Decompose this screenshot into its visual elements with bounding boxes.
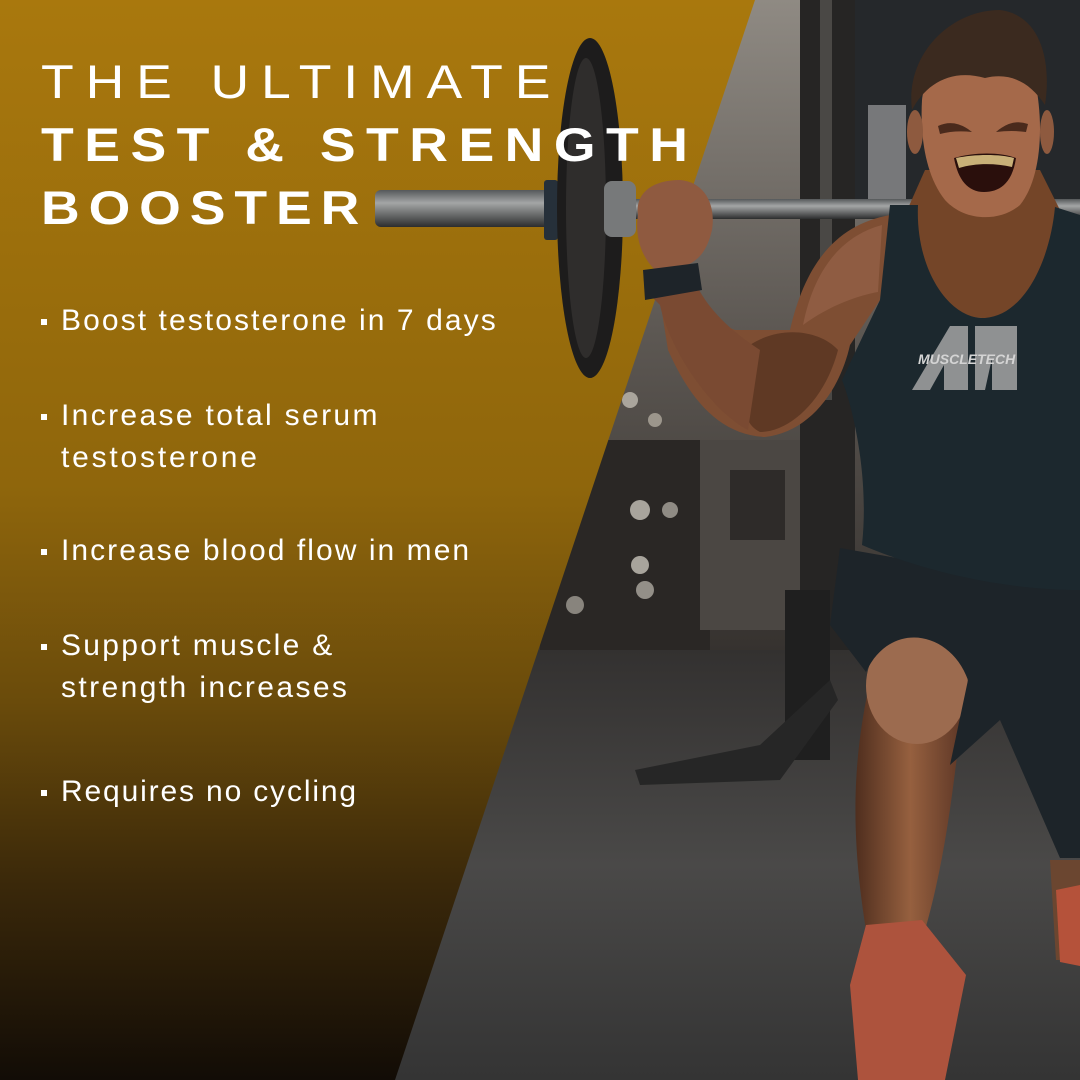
bullet 5: Requires no cycling xyxy=(61,775,358,808)
title xyxy=(41,55,698,234)
mouth xyxy=(954,154,1016,192)
upper arm and shoulder xyxy=(660,215,890,437)
shoulder highlight xyxy=(803,225,882,325)
front calf xyxy=(855,690,965,930)
logo: MUSCLETECH xyxy=(918,351,1016,367)
title line 2: TEST & STRENGTH xyxy=(41,118,698,171)
neck and chest xyxy=(905,170,1060,318)
bullet 2 xyxy=(41,399,380,474)
wrist strap xyxy=(643,263,702,300)
hair xyxy=(911,10,1047,110)
gym background xyxy=(380,0,1080,1080)
head xyxy=(922,63,1040,217)
back leg xyxy=(1050,860,1080,960)
shoe xyxy=(850,920,966,1080)
athlete xyxy=(637,10,1080,1080)
title line 3: BOOSTER xyxy=(41,181,368,234)
bullet list xyxy=(41,304,498,808)
shorts xyxy=(830,548,1080,858)
squinting eyes xyxy=(938,122,1028,134)
arm shadow xyxy=(744,332,838,432)
icon: barbell xyxy=(375,38,1080,378)
logo xyxy=(912,326,1017,390)
bullet 3: Increase blood flow in men xyxy=(61,534,471,567)
bullet 4 xyxy=(41,629,349,704)
bullet 1: Boost testosterone in 7 days xyxy=(61,304,498,337)
bullet 2: testosterone xyxy=(61,441,260,474)
gold panel xyxy=(0,0,755,1080)
hand xyxy=(637,180,713,270)
tank top xyxy=(842,205,1080,590)
bullet 2: Increase total serum xyxy=(61,399,380,432)
knee xyxy=(866,628,968,744)
title line 1: THE ULTIMATE xyxy=(41,55,562,108)
bullet 4: Support muscle & xyxy=(61,629,335,662)
bullet 4: strength increases xyxy=(61,671,349,704)
forearm xyxy=(650,288,760,430)
